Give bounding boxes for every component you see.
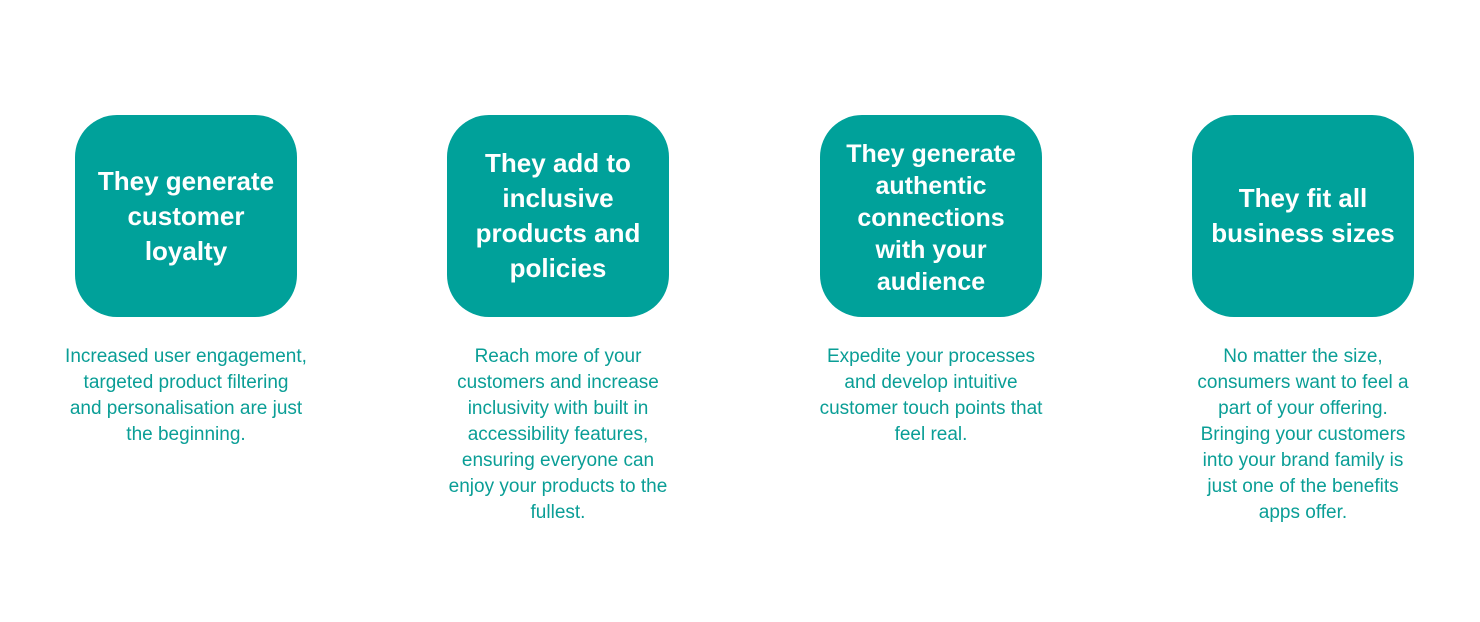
text: loyalty description: targeted product filtering [84, 372, 288, 393]
text: inclusive description: inclusivity with built in [468, 398, 648, 419]
text: connections description: feel real. [895, 424, 967, 445]
text: loyalty description: and personalisation are just [70, 398, 302, 419]
panel: authentic connections: audience [877, 268, 985, 296]
text: inclusive description: customers and increase [457, 372, 659, 393]
panel: authentic connections [820, 115, 1042, 317]
text: business sizes description: consumers want to feel a [1197, 372, 1409, 393]
text: loyalty description: the beginning. [126, 424, 246, 445]
text: business sizes description: No matter the size, [1223, 346, 1383, 367]
text: business sizes description: part of your offering. [1218, 398, 1388, 419]
text: business sizes description: into your brand family is [1203, 450, 1403, 471]
text: inclusive description: ensuring everyone can [462, 450, 654, 471]
panel: customer loyalty: They generate [98, 166, 274, 196]
panel: business sizes [1192, 115, 1414, 317]
panel: authentic connections: authentic [875, 172, 987, 200]
text: connections description: customer touch points that [820, 398, 1042, 419]
text: inclusive description: accessibility features, [468, 424, 648, 445]
text: inclusive description: fullest. [531, 502, 585, 523]
text: loyalty description [65, 346, 307, 445]
text: business sizes description: apps offer. [1259, 502, 1347, 523]
text: business sizes description [1197, 346, 1409, 523]
panel: authentic connections: connections [857, 204, 1005, 232]
text: business sizes description: Bringing your customers [1201, 424, 1405, 445]
panel: inclusive products: inclusive [502, 183, 614, 213]
panel: authentic connections: They generate [846, 140, 1016, 168]
text: loyalty description: Increased user engagement, [65, 346, 307, 367]
panel: business sizes: business sizes [1211, 218, 1395, 248]
panel: inclusive products [447, 115, 669, 317]
text: connections description: and develop intuitive [844, 372, 1018, 393]
panel: inclusive products: policies [510, 253, 606, 283]
text: inclusive description: Reach more of your [475, 346, 641, 367]
panel: inclusive products: They add to [485, 148, 631, 178]
panel: customer loyalty: loyalty [145, 236, 227, 266]
text: connections description: Expedite your processes [827, 346, 1035, 367]
text: connections description [820, 346, 1042, 445]
panel: customer loyalty [75, 115, 297, 317]
panel: customer loyalty: customer [127, 200, 245, 230]
panel: inclusive products: products and [476, 218, 640, 248]
text: inclusive description: enjoy your products to the [449, 476, 667, 497]
panel: authentic connections: with your [875, 236, 987, 264]
text: inclusive description [449, 346, 667, 523]
panel: business sizes: They fit all [1239, 183, 1367, 213]
text: business sizes description: just one of the benefits [1207, 476, 1399, 497]
